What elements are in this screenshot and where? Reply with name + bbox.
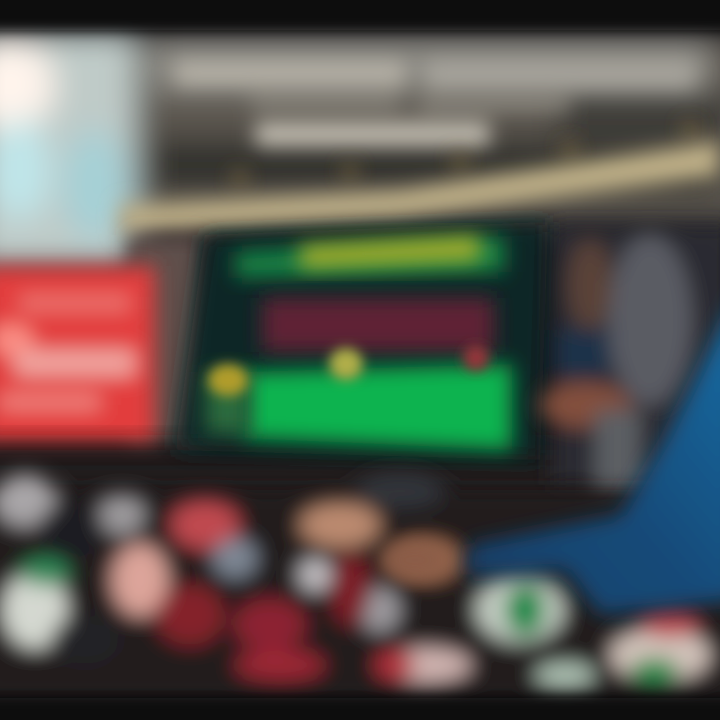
hand over chips <box>380 542 450 578</box>
beige shelf <box>120 140 720 234</box>
lower dark zone <box>0 450 720 500</box>
title: blurred headline text <box>175 62 695 146</box>
chart: top band <box>235 236 505 278</box>
chart: green field <box>245 364 512 450</box>
blue sleeve <box>465 290 720 615</box>
wall beside monitor <box>130 235 205 445</box>
bottom edge band <box>0 698 720 720</box>
tan dots above shelf <box>232 122 698 186</box>
poker chips <box>0 472 720 700</box>
chart: dark red grid <box>262 298 494 352</box>
panel: monitor <box>175 222 548 460</box>
scene: upper banner <box>0 30 720 270</box>
player figure <box>539 225 720 500</box>
markers <box>208 364 248 396</box>
top edge band <box>0 0 720 30</box>
panel: red sign <box>0 266 155 446</box>
